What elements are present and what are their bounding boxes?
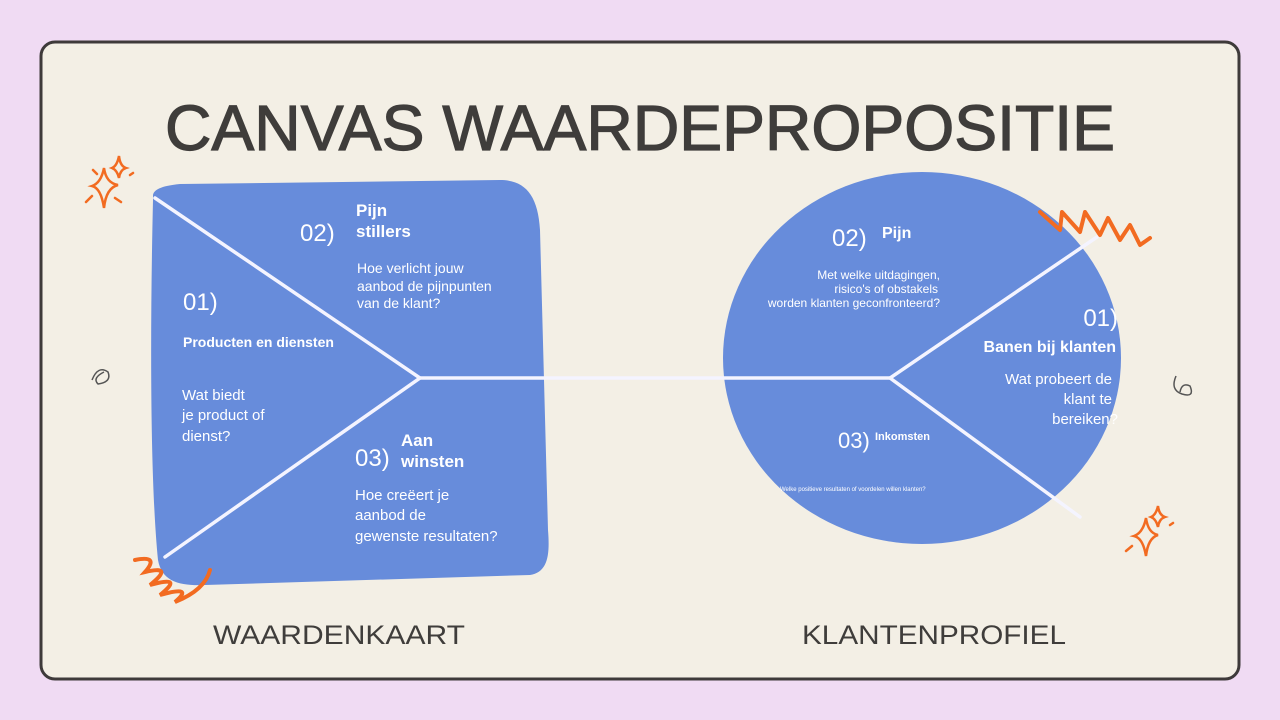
label: 02 pijn stillers [300, 201, 492, 311]
label: 03 aan winsten: winsten [400, 452, 464, 471]
label: 03 aan winsten: Aan [401, 431, 433, 450]
label: 03 aan winsten: Hoe creëert je [355, 487, 449, 504]
icon: sparkle top-left [86, 156, 133, 208]
label: waardenkaart: WAARDENKAART [213, 620, 465, 650]
panel: customer profile: Inkomsten [875, 431, 930, 443]
panel: customer profile: Wat probeert de [1005, 371, 1112, 388]
icon: sparkle bottom-right [1126, 506, 1173, 556]
panel: customer profile: Welke positieve resultaten of voordelen willen klanten? [780, 487, 926, 493]
label: 02 pijn stillers: van de klant? [357, 295, 440, 311]
icon: swirl left [92, 370, 109, 384]
panel: customer profile: 02) [832, 225, 867, 252]
panel: customer profile [723, 172, 1121, 544]
panel: customer profile: bereiken? [1052, 411, 1118, 428]
icon: swirl right [1174, 376, 1191, 395]
panel: customer profile: Banen bij klanten [984, 339, 1116, 356]
label: 01 producten: 01) [183, 289, 218, 316]
label: 03 aan winsten [355, 431, 498, 545]
label: 03 aan winsten: gewenste resultaten? [355, 528, 498, 545]
dividing lines [155, 198, 1097, 557]
label: 01 producten: Producten en diensten [183, 334, 334, 350]
panel: customer profile: risico's of obstakels [834, 282, 938, 296]
icon: squiggle top-right [1040, 212, 1150, 245]
label: 02 pijn stillers: 02) [300, 220, 335, 247]
label: 03 aan winsten: aanbod de [355, 507, 426, 524]
label: 01 producten: dienst? [182, 428, 230, 445]
panel: customer profile: Pijn [882, 225, 911, 242]
label: 01 producten: Wat biedt [182, 387, 246, 404]
label: 02 pijn stillers: Pijn [356, 201, 387, 220]
panel: customer profile: 01) [1083, 305, 1118, 332]
panel: customer profile: 03) [838, 428, 870, 453]
label: klantenprofiel: KLANTENPROFIEL [802, 620, 1066, 650]
panel: value map [151, 180, 549, 585]
label: 02 pijn stillers: Hoe verlicht jouw [357, 260, 464, 276]
icon: squiggle bottom-left [135, 559, 210, 602]
title: CANVAS WAARDEPROPOSITIE [165, 92, 1115, 164]
label: 01 producten: je product of [181, 407, 265, 424]
label: 03 aan winsten: 03) [355, 445, 390, 472]
label: 02 pijn stillers: aanbod de pijnpunten [357, 278, 492, 294]
panel: customer profile: Met welke uitdagingen, [817, 268, 940, 282]
panel: customer profile: worden klanten geconfronteerd? [767, 296, 940, 310]
panel: customer profile: klant te [1064, 391, 1112, 408]
label: 02 pijn stillers: stillers [356, 222, 411, 241]
label: 01 producten [181, 289, 334, 445]
